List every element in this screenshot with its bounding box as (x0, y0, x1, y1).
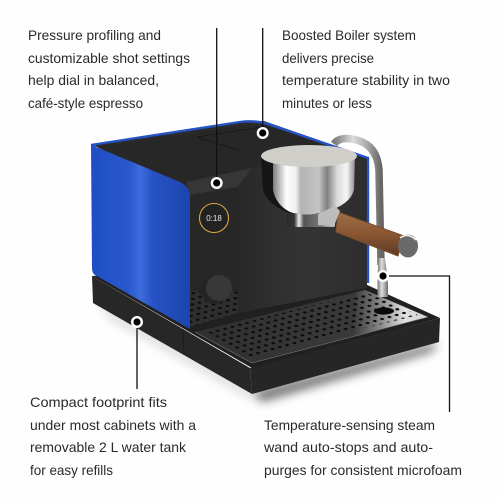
text block: boiler: delivers precise (282, 50, 374, 66)
blue rim and right edge (91, 121, 368, 283)
group head (261, 155, 292, 214)
text block: footprint: Compact footprint fits (30, 394, 167, 410)
text block: boiler: minutes or less (282, 95, 372, 111)
drop shadow under the machine (96, 302, 438, 402)
base plinth (92, 270, 440, 394)
text block: pressure profiling: café-style espresso (28, 95, 143, 111)
text block: pressure profiling (28, 27, 190, 111)
text block: boiler: Boosted Boiler system (282, 27, 416, 43)
text block: boiler (282, 27, 450, 111)
text block: pressure profiling: Pressure profiling and (28, 27, 161, 43)
text block: boiler: temperature stability in two (282, 72, 450, 88)
text block: footprint: removable 2 L water tank (30, 439, 187, 455)
espresso machine (91, 121, 440, 394)
body front face (238, 147, 366, 313)
drip tray grate (195, 290, 428, 363)
spout bracket (318, 206, 340, 226)
blue side panel (91, 144, 190, 329)
text block: steam wand (263, 417, 462, 478)
icon: timer display: 0:18 (206, 214, 222, 223)
text block: steam wand: Temperature-sensing steam (264, 417, 435, 433)
marker: boiler (257, 127, 269, 139)
text block: footprint: for easy refills (30, 462, 113, 478)
leader line: pressure profiling (216, 28, 218, 183)
marker: footprint (131, 316, 143, 328)
text block: pressure profiling: customizable shot settings (28, 50, 190, 66)
leader line: footprint (136, 322, 138, 389)
handle end cap (398, 234, 418, 258)
steam wand (334, 139, 388, 297)
icon: control knob (201, 275, 232, 304)
leader line: steam wand (383, 276, 450, 412)
text block: steam wand: purges for consistent microfoam (264, 462, 462, 478)
leader line: boiler (262, 28, 264, 133)
collar (287, 214, 335, 227)
top disc (261, 145, 357, 167)
control panel (190, 187, 238, 327)
portafilter (261, 145, 418, 258)
wooden handle (336, 212, 404, 256)
marker: pressure profiling (211, 177, 223, 189)
marker: steam wand (377, 270, 389, 282)
text block: footprint: under most cabinets with a (30, 417, 196, 433)
text block: pressure profiling: help dial in balanced, (28, 72, 159, 88)
basket cup (273, 155, 355, 214)
small drip grate (190, 291, 238, 327)
body back and top surface (91, 121, 367, 327)
text block: steam wand: wand auto-stops and auto- (263, 439, 433, 455)
text block: footprint (30, 394, 196, 478)
